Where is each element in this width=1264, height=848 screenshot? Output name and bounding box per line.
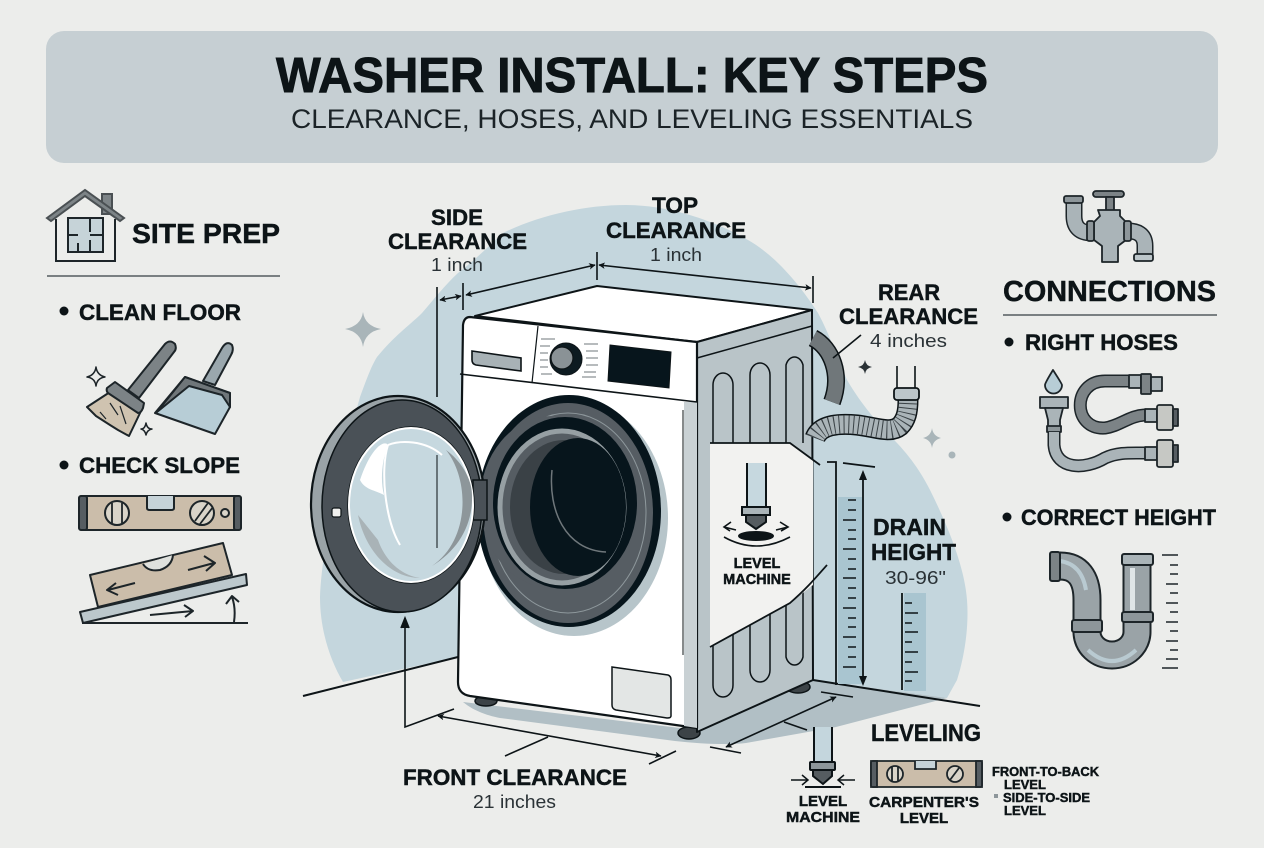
- secondary ruler: [902, 593, 926, 691]
- item: right hoses: RIGHT HOSES: [1025, 330, 1178, 355]
- sparkles: [345, 312, 956, 458]
- drain height ruler: [827, 462, 875, 686]
- floor lines: [303, 657, 980, 706]
- label: level machine: LEVEL: [799, 793, 847, 810]
- label: level machine: LEVEL: [734, 556, 781, 572]
- feet: [475, 681, 810, 739]
- icon: spirit level: [79, 496, 241, 530]
- background blob: [320, 205, 968, 698]
- label: level machine: MACHINE: [786, 809, 860, 826]
- label: side clearance: 1 inch: [431, 255, 483, 275]
- control panel: [460, 326, 697, 402]
- icon: level foot: [724, 463, 790, 546]
- bottom service panel: [612, 667, 671, 718]
- list: level directions: LEVEL: [1004, 803, 1046, 818]
- icon: valve and pipes: [1064, 191, 1153, 262]
- panel: site prep: [47, 190, 280, 623]
- side face: [697, 310, 813, 732]
- label: side clearance: [388, 205, 527, 275]
- label: front clearance: FRONT CLEARANCE: [403, 765, 627, 790]
- label: top clearance: 1 inch: [650, 245, 702, 265]
- label: front clearance: [403, 765, 627, 812]
- list: level directions: [992, 764, 1100, 818]
- list: level directions: LEVEL: [1004, 777, 1046, 792]
- panel: connections: [1002, 191, 1217, 668]
- label: top clearance: [606, 193, 746, 265]
- label: side clearance: SIDE: [431, 205, 483, 230]
- label: carpenter's level: LEVEL: [900, 810, 948, 827]
- icon: p-trap with ruler: [1050, 552, 1178, 668]
- heading: leveling: LEVELING: [871, 720, 981, 747]
- label: carpenter's level: [869, 794, 979, 827]
- label: top clearance: CLEARANCE: [606, 218, 746, 243]
- label: rear clearance: [839, 280, 978, 351]
- title banner: [46, 31, 1218, 163]
- drain hose: [815, 366, 919, 438]
- side info flap: [710, 443, 827, 647]
- item: correct height: CORRECT HEIGHT: [1021, 505, 1217, 530]
- label: rear clearance: REAR: [878, 280, 940, 305]
- item: clean floor: CLEAN FLOOR: [79, 300, 241, 325]
- icon: level on slope: [80, 543, 248, 623]
- illustration: front-load washer: [311, 286, 827, 739]
- icon: carpenter's level: [871, 761, 982, 787]
- label: drain height: HEIGHT: [871, 539, 956, 565]
- panel: leveling: [786, 720, 1100, 827]
- label: side clearance: CLEARANCE: [388, 229, 527, 254]
- dimension lines: [401, 252, 861, 764]
- drum opening: [477, 395, 668, 636]
- label: carpenter's level: CARPENTER'S: [869, 794, 979, 811]
- heading: connections: CONNECTIONS: [1003, 276, 1216, 308]
- label: front clearance: 21 inches: [473, 792, 556, 812]
- list: level directions: SIDE-TO-SIDE: [1003, 790, 1090, 805]
- rear vent hose: [813, 338, 836, 402]
- icon: house floor plan: [47, 190, 124, 261]
- item: check slope: CHECK SLOPE: [79, 453, 240, 478]
- floor shadow: [463, 680, 947, 744]
- open door: [311, 396, 487, 612]
- label: drain height: 30-96": [885, 568, 946, 588]
- label: top clearance: TOP: [652, 193, 698, 218]
- icon: hoses: [1040, 370, 1178, 467]
- front face: [458, 317, 697, 728]
- label: rear clearance: 4 inches: [870, 331, 947, 351]
- title banner: CLEARANCE, HOSES, AND LEVELING ESSENTIALS: [291, 104, 973, 134]
- heading: site prep: SITE PREP: [132, 218, 280, 249]
- label: rear clearance: CLEARANCE: [839, 304, 978, 329]
- title banner: WASHER INSTALL: KEY STEPS: [276, 49, 988, 103]
- label: drain height: DRAIN: [873, 514, 946, 540]
- icon: brush and dustpan: [87, 342, 233, 436]
- label: level machine: [786, 793, 860, 826]
- label: level machine: [723, 556, 791, 588]
- top face: [475, 286, 812, 342]
- label: level machine: MACHINE: [723, 572, 791, 588]
- list: level directions: FRONT-TO-BACK: [992, 764, 1100, 779]
- icon: level machine foot: [791, 727, 855, 787]
- label: drain height: [871, 514, 956, 588]
